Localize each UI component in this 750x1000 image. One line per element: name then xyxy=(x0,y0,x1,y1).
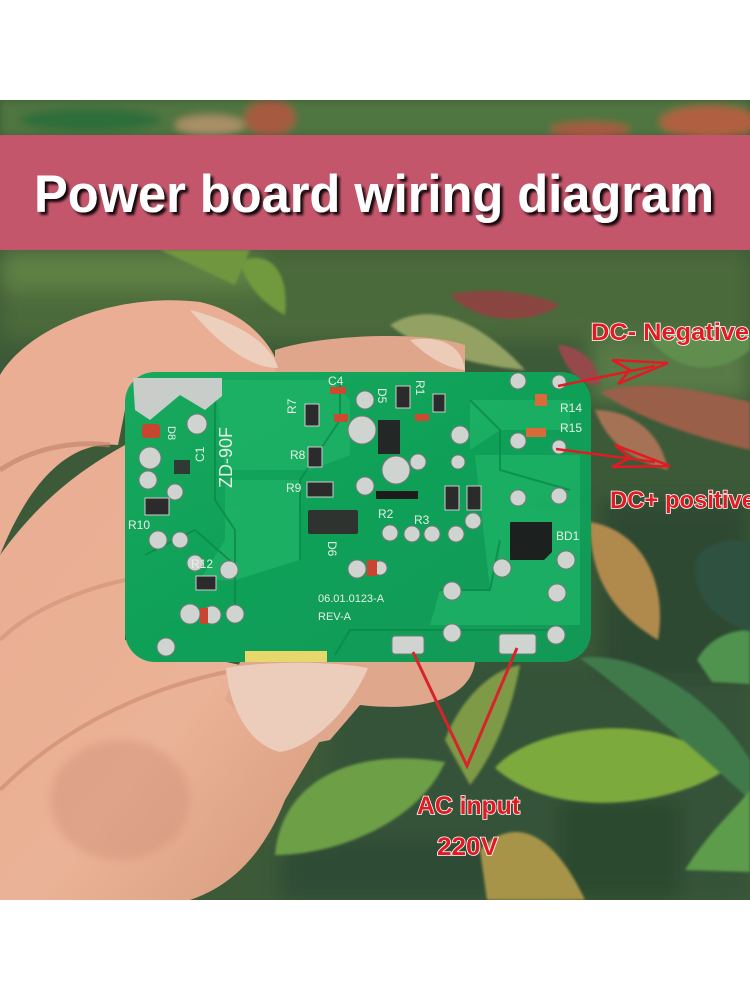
board silkscreen labels: R15 xyxy=(560,421,582,435)
board silkscreen labels: BD1 xyxy=(556,529,580,543)
components xyxy=(142,386,552,624)
board silkscreen labels: R14 xyxy=(560,401,582,415)
board silkscreen labels: R1 xyxy=(413,380,427,396)
arrows: AC input lines xyxy=(413,648,517,766)
label: AC input 220V: AC input xyxy=(417,792,521,820)
label: DC negative: DC- Negative xyxy=(591,319,749,346)
solder joints xyxy=(139,373,575,656)
title: Power board wiring diagram xyxy=(34,165,714,224)
board silkscreen labels: 06.01.0123-A xyxy=(318,593,385,605)
board silkscreen labels: R3 xyxy=(414,513,430,527)
banner xyxy=(0,135,750,250)
yellow edge mark xyxy=(245,651,327,662)
photo: hand holding the board xyxy=(0,300,475,900)
board silkscreen labels: R2 xyxy=(378,507,394,521)
board silkscreen labels: REV-A xyxy=(318,611,352,623)
board silkscreen labels: D6 xyxy=(325,541,339,557)
infographic: power board wiring diagram xyxy=(0,100,750,900)
board silkscreen labels: D8 xyxy=(165,426,177,440)
board silkscreen labels: R9 xyxy=(286,481,302,495)
board silkscreen labels: C1 xyxy=(193,446,207,462)
board silkscreen labels: D5 xyxy=(375,388,389,404)
photo: blurred foliage background xyxy=(0,100,750,900)
board silkscreen labels: R8 xyxy=(290,448,306,462)
board silkscreen labels: R10 xyxy=(128,518,150,532)
board silkscreen labels: ZD-90F xyxy=(216,427,236,488)
leaves behind the banner xyxy=(0,100,750,138)
label: AC input 220V xyxy=(416,795,520,856)
label: AC input 220V: 220V xyxy=(437,833,498,861)
board silkscreen labels: R7 xyxy=(285,398,299,414)
board silkscreen labels: C4 xyxy=(328,374,344,388)
corner solder area xyxy=(133,378,222,420)
circuit board xyxy=(125,372,591,662)
arrow: DC positive xyxy=(556,445,670,467)
leaves around the board xyxy=(160,250,750,900)
board silkscreen labels xyxy=(128,374,582,623)
board traces xyxy=(200,380,580,625)
board silkscreen labels: R12 xyxy=(191,557,213,571)
arrow: DC negative xyxy=(558,360,668,386)
